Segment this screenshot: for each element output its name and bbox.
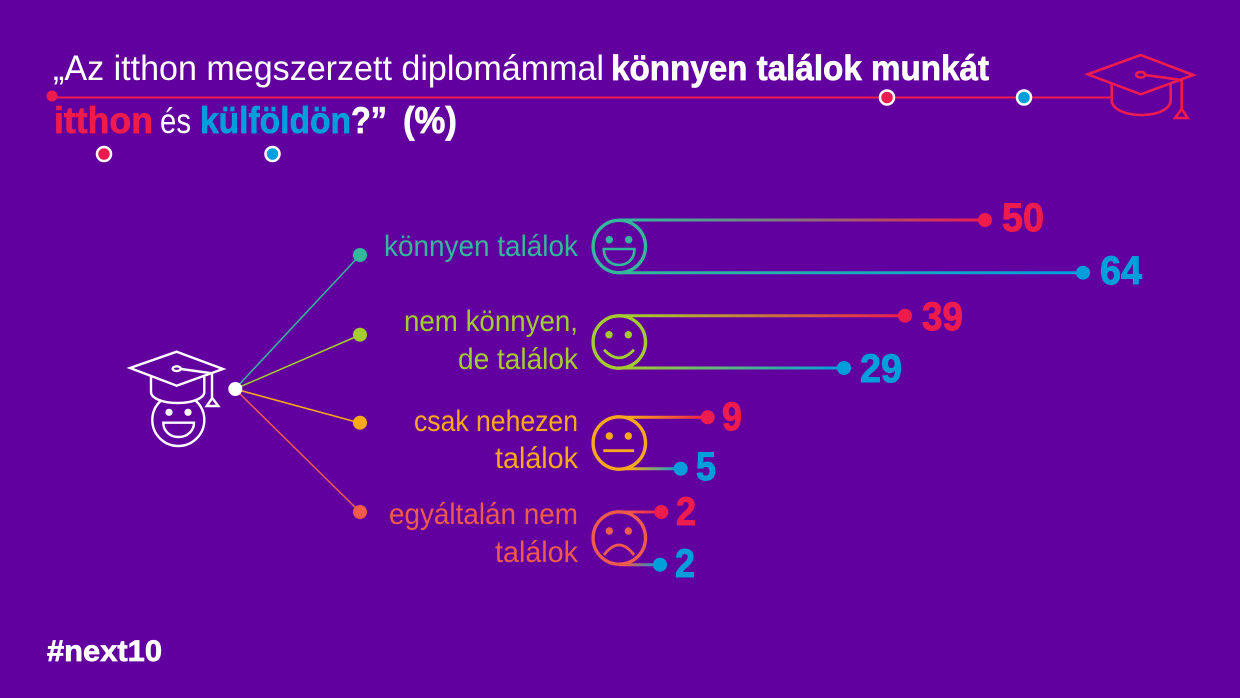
row: egyáltalán nem találok	[389, 490, 696, 586]
title: itthon	[54, 100, 153, 141]
row: nem könnyen, de találok: nem könnyen,	[404, 305, 578, 338]
row: nem könnyen, de találok	[404, 295, 963, 391]
row: könnyen találok	[384, 196, 1143, 293]
row: nem könnyen, de találok: de találok	[458, 343, 579, 376]
row: nem könnyen, de találok: 29	[860, 347, 902, 391]
legend dot: itthon	[97, 147, 111, 161]
row: könnyen találok: könnyen találok	[384, 230, 579, 263]
title: és	[160, 102, 191, 141]
row: csak nehezen találok: 9	[722, 395, 742, 439]
icon: red graduation cap	[1088, 55, 1193, 118]
title: ?”	[351, 100, 387, 141]
row: nem könnyen, de találok: 39	[922, 295, 963, 339]
icon: white graduate with smiling face	[130, 352, 223, 446]
title	[53, 49, 989, 141]
row: egyáltalán nem találok: 2	[676, 490, 696, 534]
row: könnyen találok: 50	[1002, 196, 1044, 240]
row: könnyen találok: 64	[1100, 249, 1143, 293]
title: külföldön	[200, 100, 351, 141]
row: egyáltalán nem találok: 2	[675, 542, 695, 586]
logo: #next10: #next10	[47, 635, 162, 668]
title: könnyen találok munkát	[611, 49, 989, 88]
title: (%)	[403, 100, 457, 141]
row: csak nehezen találok: találok	[495, 442, 579, 475]
connector lines from graduate to categories	[228, 248, 367, 519]
row: csak nehezen találok	[414, 395, 742, 489]
row: egyáltalán nem találok: találok	[495, 536, 579, 569]
row: csak nehezen találok: csak nehezen	[414, 405, 578, 438]
title: „Az itthon megszerzett diplomámmal	[53, 49, 604, 88]
title rule with markers	[46, 90, 1112, 104]
row: csak nehezen találok: 5	[696, 445, 716, 489]
legend dot: külföldön	[266, 147, 280, 161]
row: egyáltalán nem találok: egyáltalán nem	[389, 498, 578, 531]
